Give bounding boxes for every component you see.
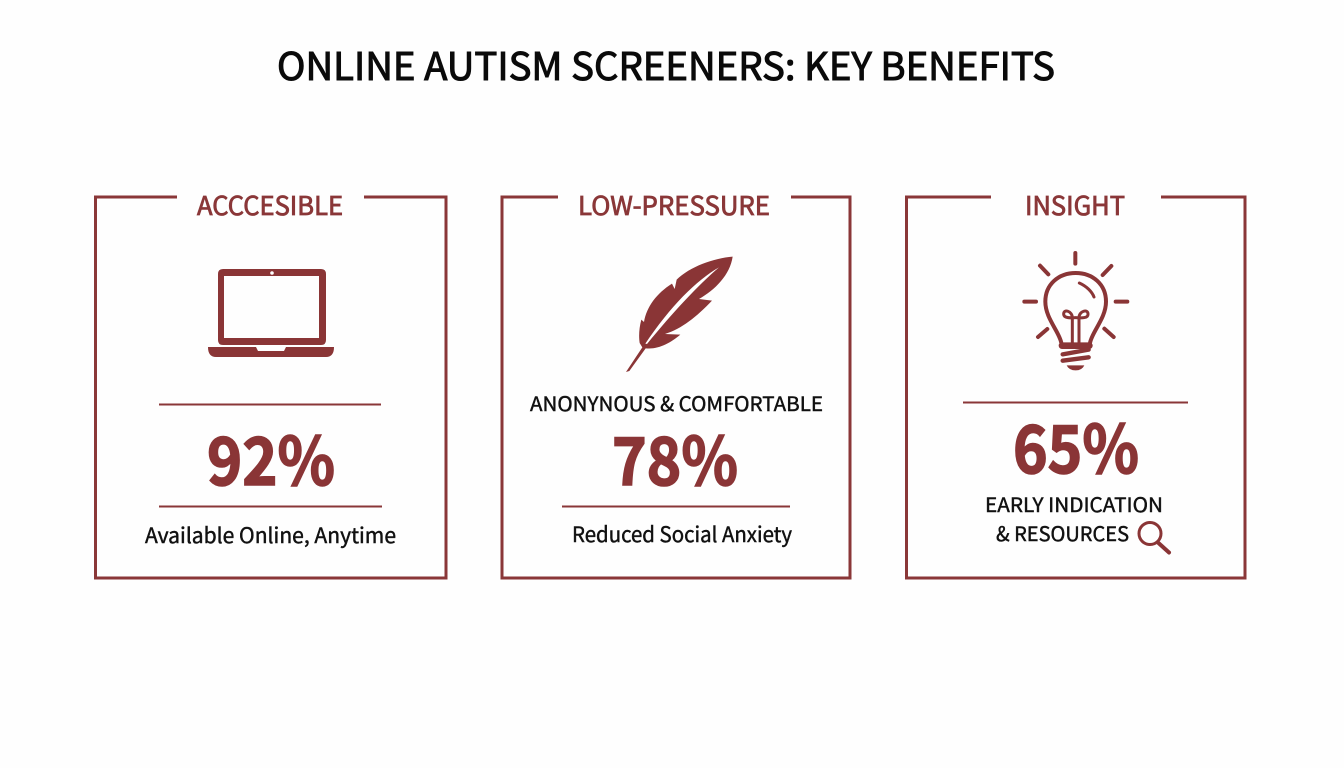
caption: reduced anxiety: Reduced Social Anxiety [572,519,792,549]
panel frame [906,197,1245,578]
caption: early indication and resources [985,489,1163,547]
panel frame [96,197,446,578]
statistic: 65%: 65% [1013,397,1139,493]
title: ONLINE AUTISM SCREENERS: KEY BENEFITS [277,36,1055,91]
heading: low-pressure: LOW-PRESSURE [578,186,770,223]
heading: insight: INSIGHT [1025,186,1125,223]
panel: low-pressure [502,186,850,578]
icon: light bulb [1024,253,1127,370]
caption: early indication and resources: EARLY INDICATION [985,489,1163,518]
panel: insight [906,186,1245,578]
icon: magnifying glass [1139,522,1169,552]
icon: feather [626,257,733,372]
caption: available online: Available Online, Anytime [145,520,396,550]
subheading: anonymous: ANONYNOUS & COMFORTABLE [530,388,823,417]
panel: accessible [96,186,446,578]
caption: early indication and resources: & RESOURCES [996,518,1129,547]
heading: accessible: ACCCESIBLE [197,186,343,223]
icon: laptop [208,269,334,357]
panel frame [502,197,850,578]
statistic: 78%: 78% [612,409,738,505]
statistic: 92%: 92% [207,409,335,505]
